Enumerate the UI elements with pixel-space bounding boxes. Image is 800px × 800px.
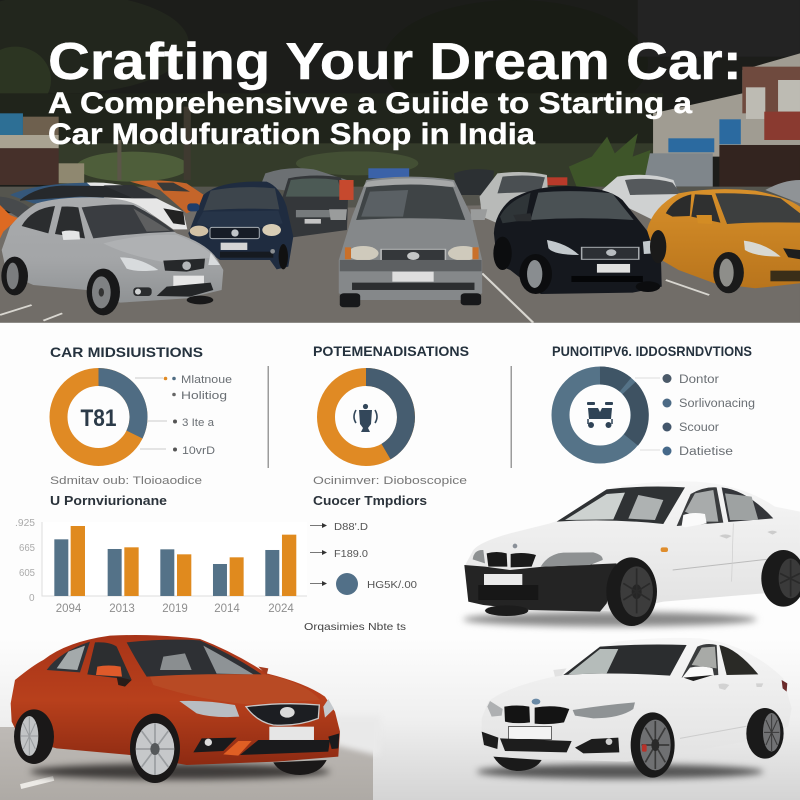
car: red sedan lower left (11, 635, 340, 783)
legend: Mlatnoue (181, 374, 232, 386)
title line 2: A Comprehensivve a Guiide to Starting a (48, 87, 692, 120)
street scene background (0, 0, 800, 323)
y axis labels: 0 (29, 593, 35, 604)
legend (635, 374, 755, 458)
list values: HG5K/.00 (367, 579, 417, 591)
backdrop gradient behind lower cars (0, 640, 800, 800)
x axis labels: 2013 (109, 603, 135, 615)
marker circle (336, 573, 358, 595)
heading: POTEMENADISATIONS (313, 343, 469, 359)
arrows (310, 523, 327, 586)
car: white BMW upper right (463, 481, 800, 627)
car: dark sedan behind (282, 176, 354, 237)
x axis labels: 2094 (56, 603, 82, 615)
y axis labels: 605 (19, 568, 35, 579)
car: white BMW lower right (477, 638, 792, 779)
legend (135, 374, 232, 457)
y axis labels: 665 (19, 543, 35, 554)
heading: CAR MIDSIUISTIONS (50, 344, 203, 360)
car: orange sedan (647, 189, 800, 293)
panel: hero photo of parked cars (0, 0, 800, 323)
title line 3: Car Modufuration Shop in India (48, 118, 535, 151)
heading: PUNOITIPV6. IDDOSRNDVTIONS (552, 343, 752, 359)
footnote: Orqasimies Nbte ts (304, 621, 406, 633)
title line 1: Crafting Your Dream Car: (48, 33, 742, 91)
list values: D88'.D (334, 521, 368, 533)
legend: 10vrD (182, 445, 215, 457)
bars (54, 526, 296, 596)
legend: Dontor (679, 374, 719, 386)
ground behind red car (0, 716, 380, 800)
legend: Datietise (679, 446, 733, 458)
caption: Sdmitav oub: Tloioaodice (50, 475, 202, 487)
panel: car modifications donut (50, 344, 232, 508)
y axis labels: .925 (15, 518, 35, 529)
x axis labels (56, 603, 294, 615)
icon: trophy (354, 404, 377, 432)
title (48, 33, 742, 151)
panel: third donut (552, 343, 755, 458)
legend: Holitiog (181, 390, 227, 402)
x axis labels: 2014 (214, 603, 240, 615)
caption: Ocinimver: Dioboscopice (313, 475, 467, 487)
donut chart (326, 377, 406, 457)
list values: F189.0 (334, 548, 368, 560)
x axis labels: 2024 (268, 603, 294, 615)
lane stripes (0, 273, 709, 323)
list values (334, 521, 417, 591)
icon: cart (587, 402, 613, 428)
legend: 3 Ite a (182, 417, 215, 429)
background cars right (260, 168, 800, 223)
donut chart (560, 375, 640, 454)
x axis labels: 2019 (162, 603, 188, 615)
bar chart (15, 518, 307, 615)
cars parked behind silver sedan (0, 180, 204, 238)
legend: Scouor (679, 422, 719, 434)
panel: cost list with arrows (304, 521, 417, 633)
car: silver sedan (1, 197, 223, 315)
subheading: Cuocer Tmpdiors (313, 493, 427, 508)
donut value: T81 (80, 405, 116, 432)
car: black hatchback (493, 186, 662, 294)
car: navy hatchback (187, 181, 293, 269)
legend: Sorlivonacing (679, 398, 755, 410)
donut chart (58, 377, 139, 457)
y axis labels (15, 518, 35, 604)
car: grey hatchback front (329, 177, 487, 307)
panel: potential modifications donut (313, 343, 469, 508)
subheading: U Pornviurionane (50, 493, 167, 508)
